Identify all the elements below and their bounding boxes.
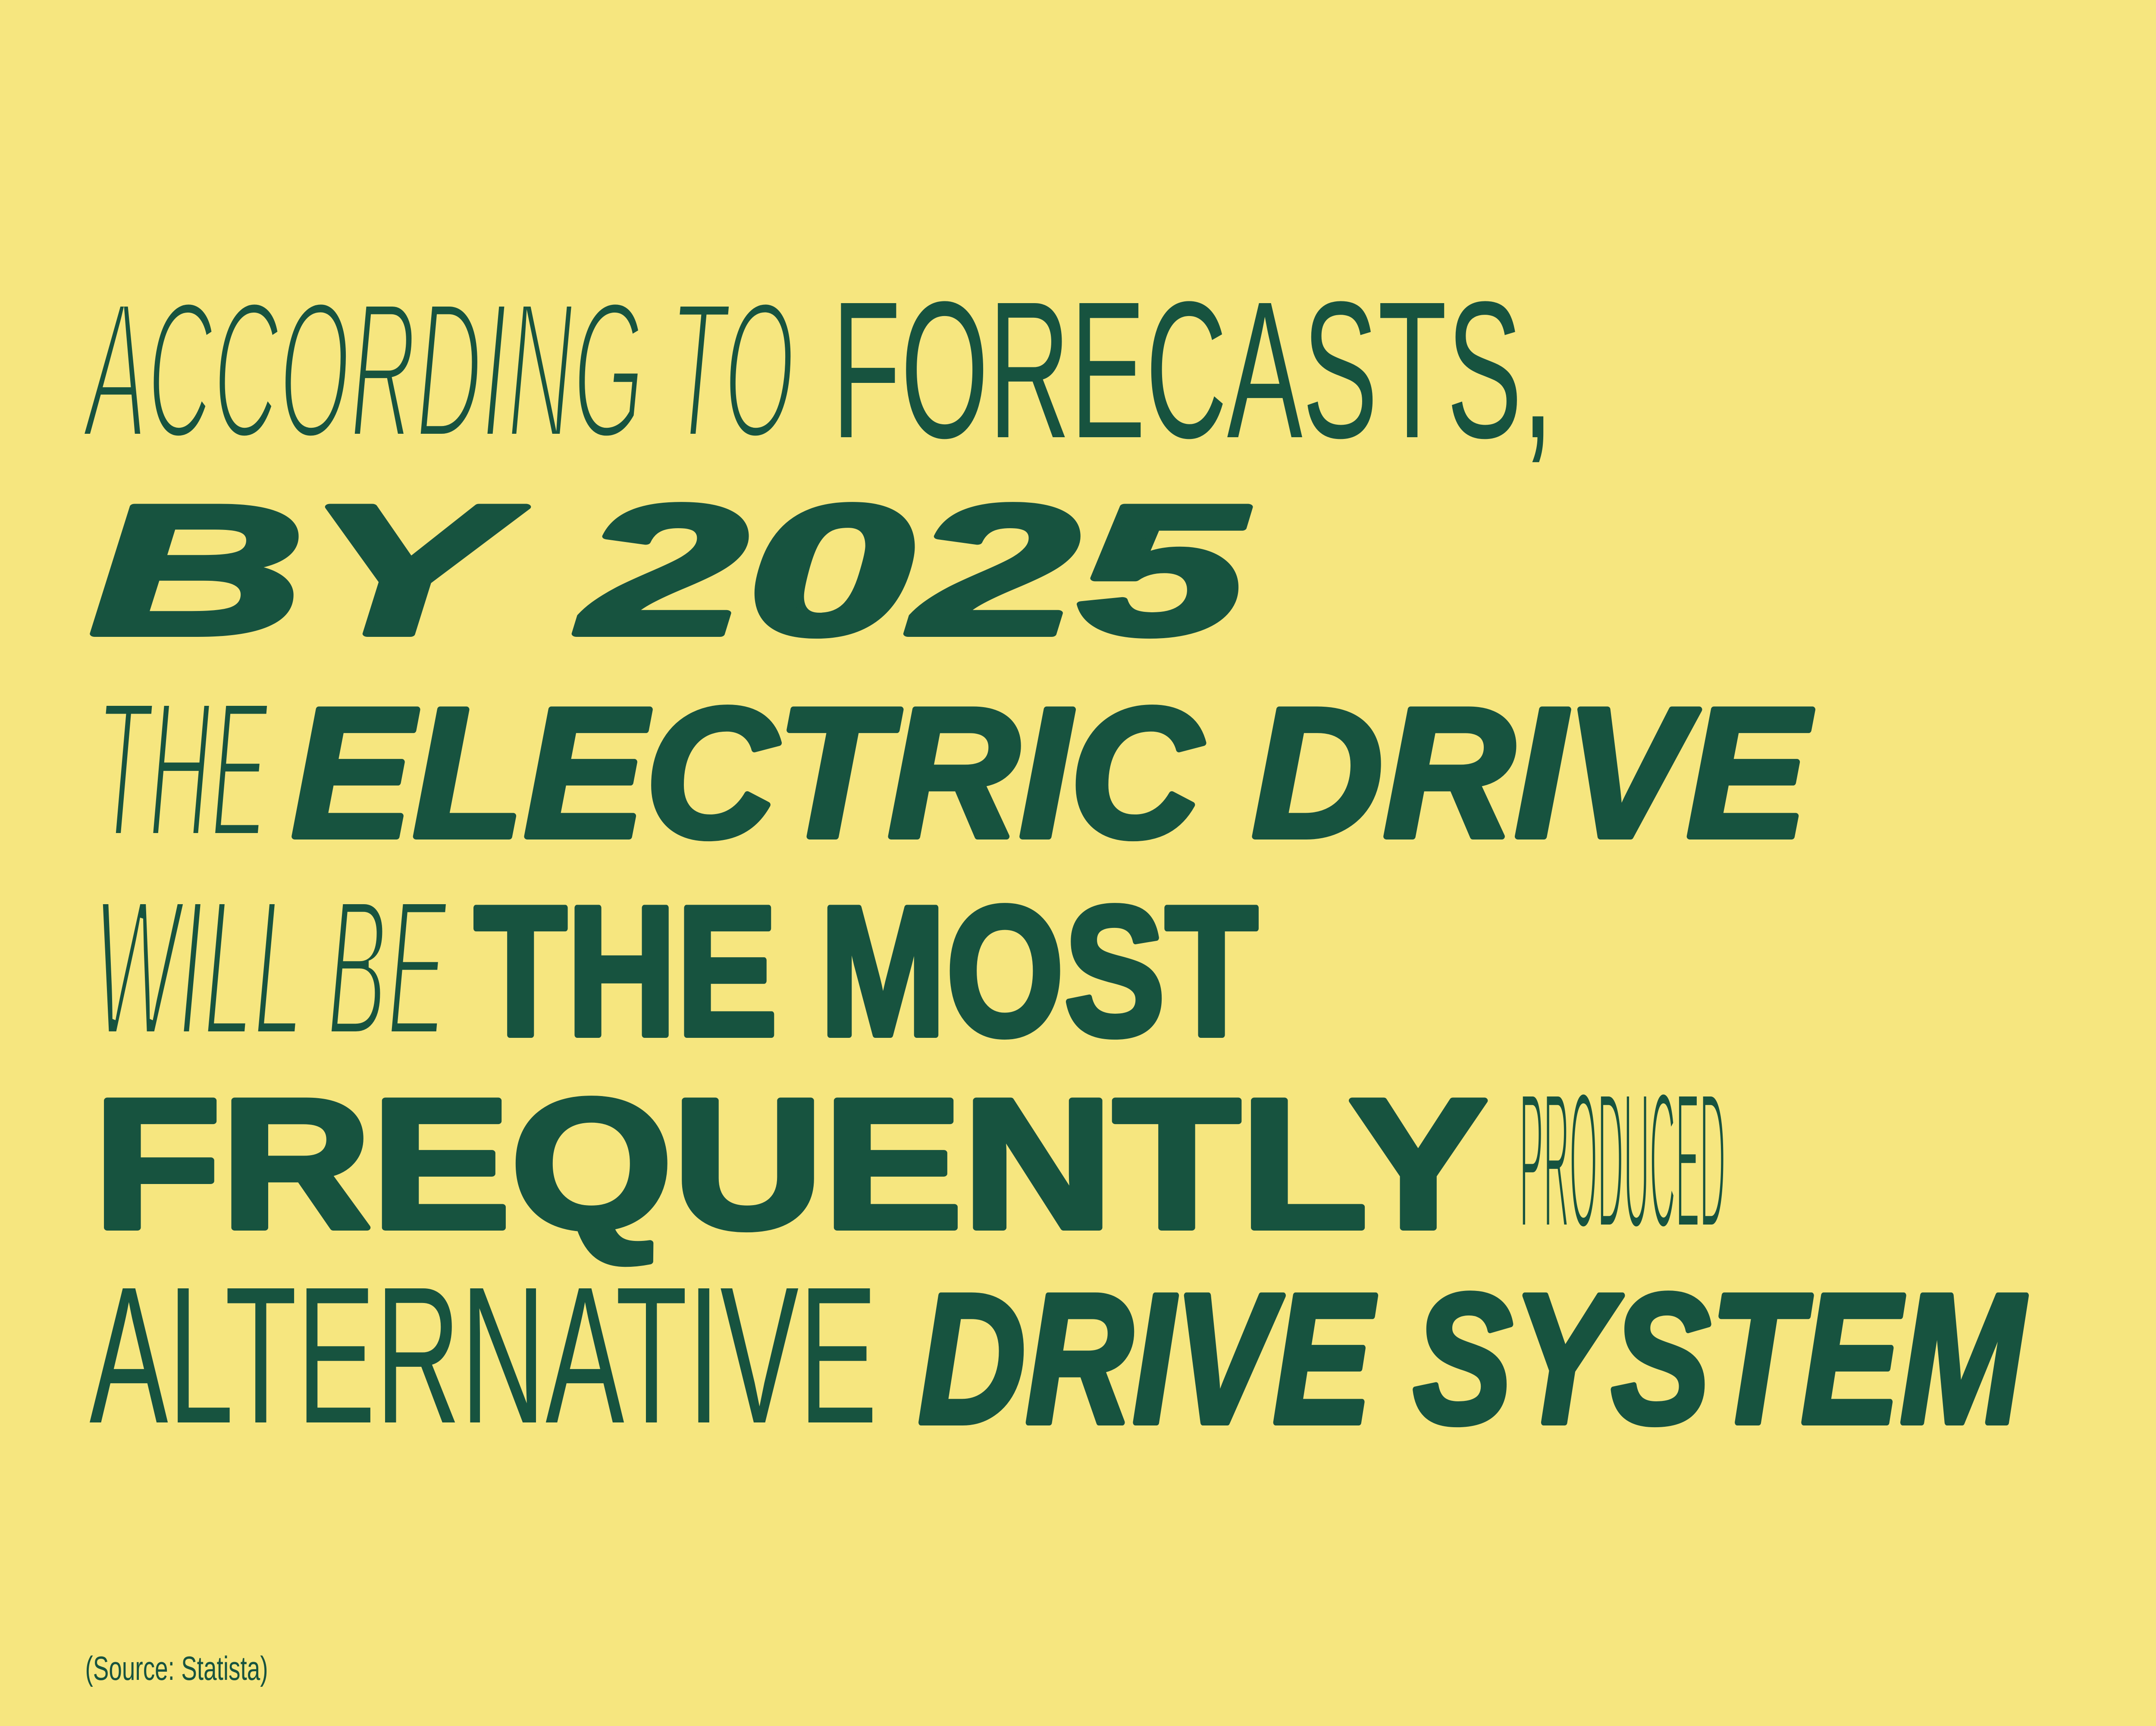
line 4: will be the most: THE MOST: [474, 868, 1258, 1074]
line 1: according to forecasts: ACCORDING TO: [81, 261, 795, 479]
line 5: frequently produced: FREQUENTLY: [94, 1061, 1488, 1267]
line 6: alternative drive system: [89, 1246, 2028, 1464]
line 6: alternative drive system: ALTERNATIVE: [89, 1246, 877, 1464]
headline statement: [81, 261, 2028, 1464]
line 3: the electric drive: ELECTRIC DRIVE: [291, 670, 1814, 876]
line 3: the electric drive: THE: [96, 660, 270, 878]
line 4: will be the most: [94, 858, 1258, 1077]
line 2: by 2025: BY 2025: [89, 467, 1251, 673]
line 4: will be the most: WILL BE: [94, 858, 449, 1077]
source note: (Source: Statista): [85, 1650, 268, 1687]
line 1: according to forecasts: FORECASTS,: [832, 261, 1554, 479]
line 5: frequently produced: [94, 1051, 1726, 1269]
line 6: alternative drive system: DRIVE SYSTEM: [918, 1256, 2028, 1462]
